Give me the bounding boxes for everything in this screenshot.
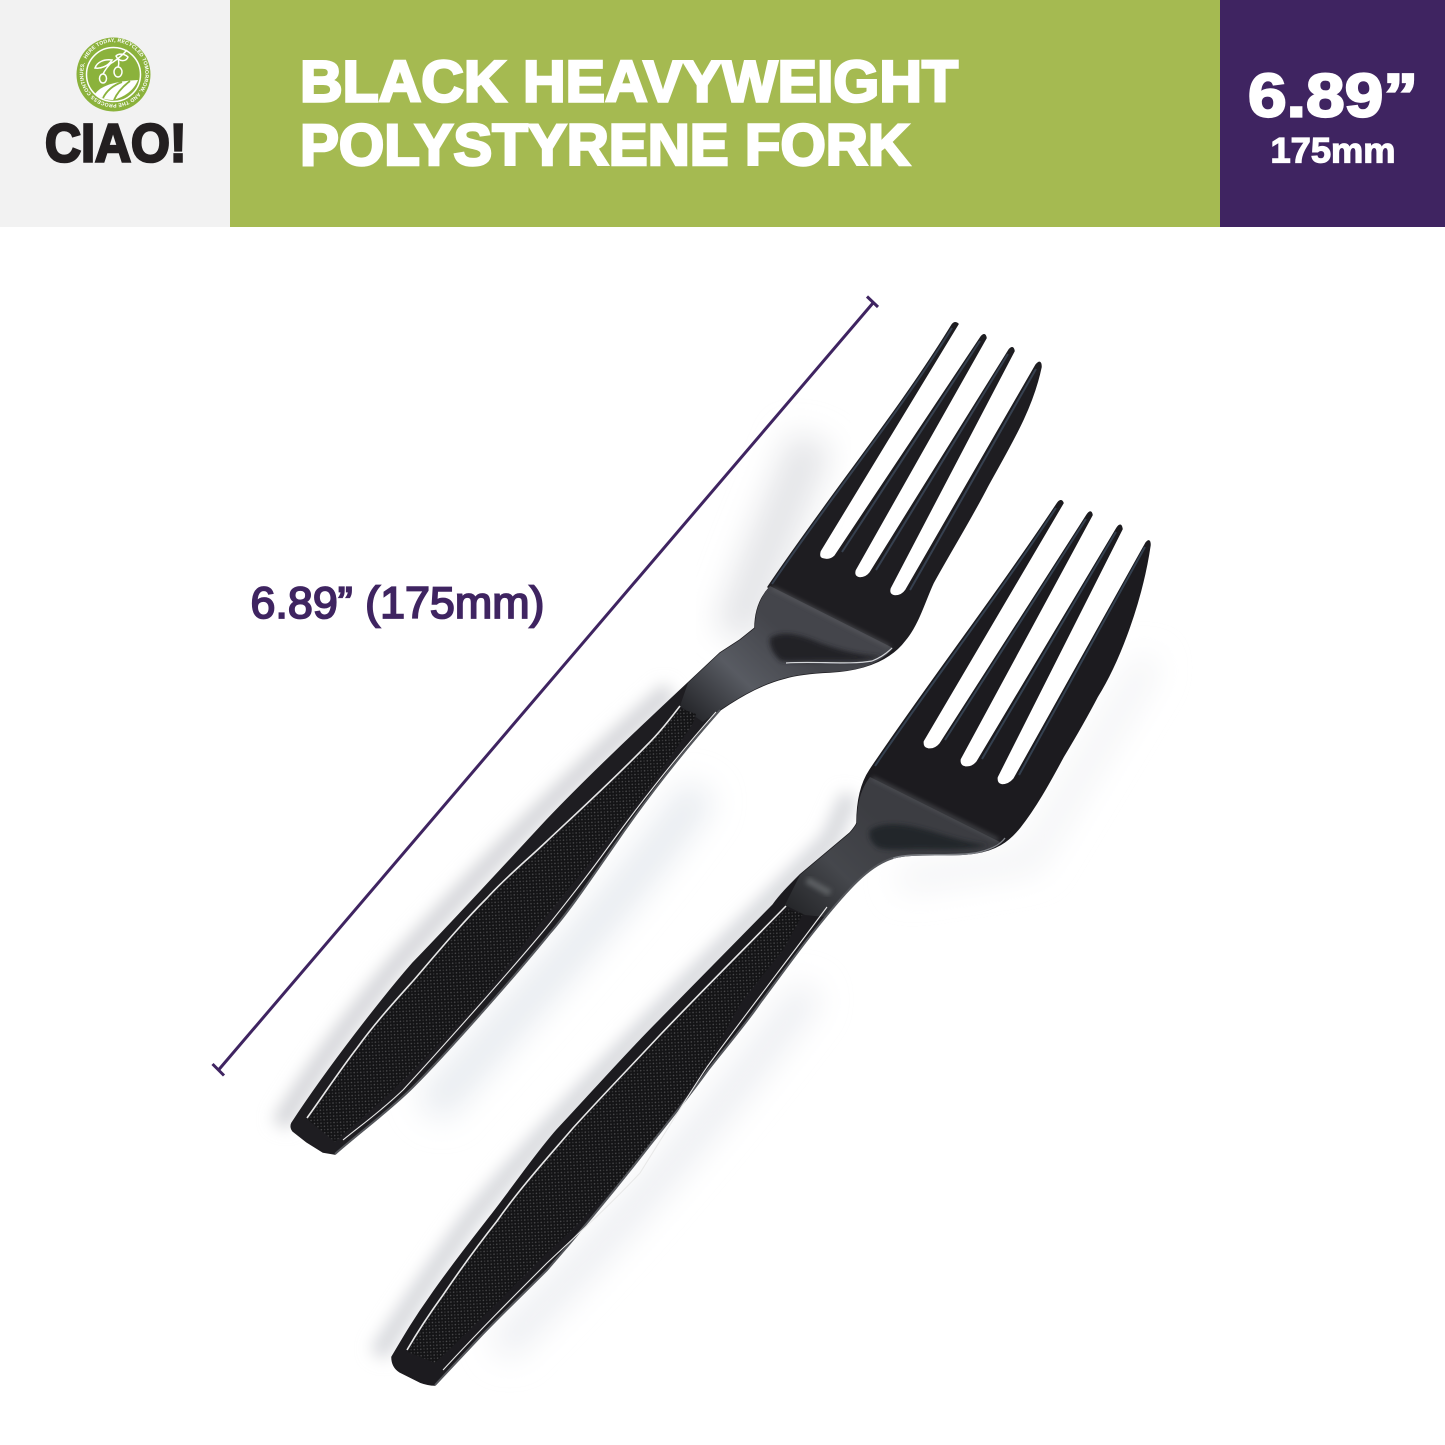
title: POLYSTYRENE FORK bbox=[300, 113, 910, 178]
head crease and neck bbox=[680, 586, 893, 722]
title: BLACK HEAVYWEIGHT bbox=[300, 50, 958, 114]
panel: size badge bbox=[1220, 0, 1445, 227]
crease highlight bbox=[772, 588, 890, 647]
panel: title banner bbox=[230, 0, 1220, 227]
handle white lines bbox=[407, 906, 827, 1370]
head crease and neck bbox=[785, 777, 1000, 917]
size in millimetres: 175mm bbox=[1270, 132, 1396, 170]
handle grip bbox=[408, 909, 803, 1363]
panel: brand logo bbox=[0, 0, 230, 227]
brand name: CIAO! bbox=[45, 114, 186, 174]
dimension line bbox=[212, 296, 878, 1076]
tine highlights bbox=[875, 508, 1145, 775]
neck highlight bbox=[807, 880, 830, 893]
upper fork bbox=[291, 323, 1041, 1154]
icon: recycled olive seal: HERE TODAY, RECYCLED TOMORROW, AND THE PROCESS CONTINUES. bbox=[80, 38, 149, 108]
crease highlight bbox=[872, 778, 998, 840]
lower fork bbox=[392, 501, 1150, 1385]
title bbox=[300, 50, 958, 178]
neck dark reflection bbox=[770, 634, 882, 661]
soft shadows under forks bbox=[280, 440, 1150, 1355]
handle white lines bbox=[307, 706, 716, 1140]
handle rim bbox=[435, 858, 893, 1385]
dimension label: 6.89” (175mm) bbox=[250, 579, 544, 628]
handle grip bbox=[308, 708, 696, 1142]
neck dark reflection bbox=[869, 824, 988, 850]
handle rim bbox=[335, 710, 720, 1154]
fork body bbox=[392, 501, 1150, 1385]
rim highlight bbox=[893, 838, 1005, 858]
neck rim highlight bbox=[786, 648, 892, 663]
fork body bbox=[291, 323, 1041, 1154]
size in inches: 6.89” bbox=[1248, 62, 1418, 130]
tine highlights bbox=[772, 328, 1036, 590]
